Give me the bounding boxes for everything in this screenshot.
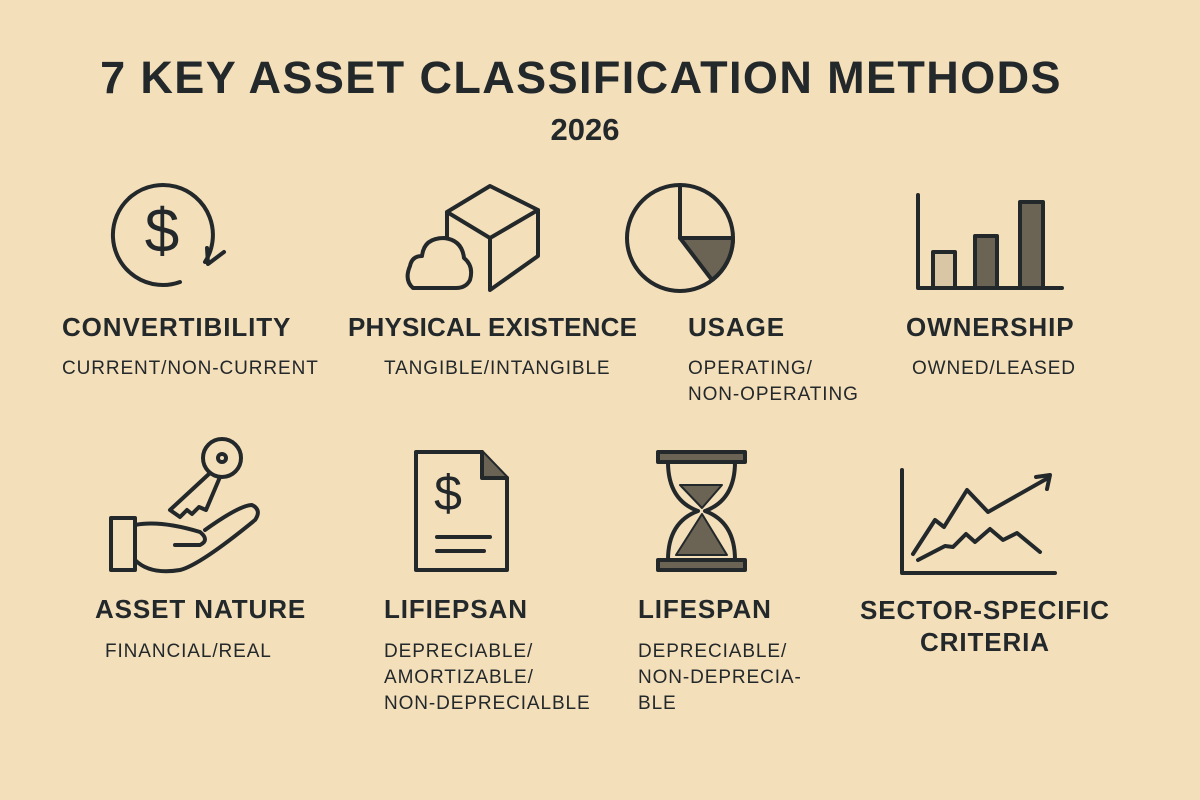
text: operating: OPERATING/ xyxy=(688,358,813,379)
text: depreciable list: NON-DEPRECIALBLE xyxy=(384,693,591,714)
label: asset nature: ASSET NATURE xyxy=(95,594,306,624)
icon: dollar circle arrow: $ xyxy=(145,197,179,266)
label: convertibility: CONVERTIBILITY xyxy=(62,312,291,342)
label: ownership: OWNERSHIP xyxy=(906,312,1074,342)
text: financial/real: FINANCIAL/REAL xyxy=(105,641,272,662)
text: depreciable list: DEPRECIABLE/ xyxy=(384,641,533,662)
label: sector-specific criteria: CRITERIA xyxy=(920,627,1050,657)
text: tangible/intangible: TANGIBLE/INTANGIBLE xyxy=(384,358,610,379)
text: depreciable/non: BLE xyxy=(638,693,677,714)
text: depreciable/non: NON-DEPRECIA- xyxy=(638,667,802,688)
text: current/non-current: CURRENT/NON-CURRENT xyxy=(62,358,319,379)
label: usage: USAGE xyxy=(688,312,785,342)
icon: document with dollar: $ xyxy=(434,465,462,521)
label: lifespan: LIFESPAN xyxy=(638,594,772,624)
icon: dollar circle arrow xyxy=(113,185,224,285)
icon: cube and cloud xyxy=(408,186,538,290)
icon: document with dollar xyxy=(416,452,507,570)
text: operating: NON-OPERATING xyxy=(688,384,859,405)
icon: pie chart xyxy=(627,185,733,291)
title: 7 KEY ASSET CLASSIFICATION METHODS xyxy=(100,52,1062,103)
subtitle year: 2026 xyxy=(551,112,619,147)
label: sector-specific criteria xyxy=(860,595,1110,657)
icon: hourglass xyxy=(658,452,745,570)
text: depreciable/non xyxy=(638,641,802,714)
text: operating xyxy=(688,358,859,405)
icon: hand with key xyxy=(111,439,258,571)
label: lifiepsan: LIFIEPSAN xyxy=(384,594,528,624)
label: physical existence: PHYSICAL EXISTENCE xyxy=(348,312,637,342)
text: owned/leased: OWNED/LEASED xyxy=(912,358,1076,379)
icon: rising line chart xyxy=(902,470,1055,573)
text: depreciable list: AMORTIZABLE/ xyxy=(384,667,534,688)
text: depreciable/non: DEPRECIABLE/ xyxy=(638,641,787,662)
label: sector-specific criteria: SECTOR-SPECIFIC xyxy=(860,595,1110,625)
text: depreciable list xyxy=(384,641,591,714)
icon: bar chart xyxy=(918,195,1062,288)
